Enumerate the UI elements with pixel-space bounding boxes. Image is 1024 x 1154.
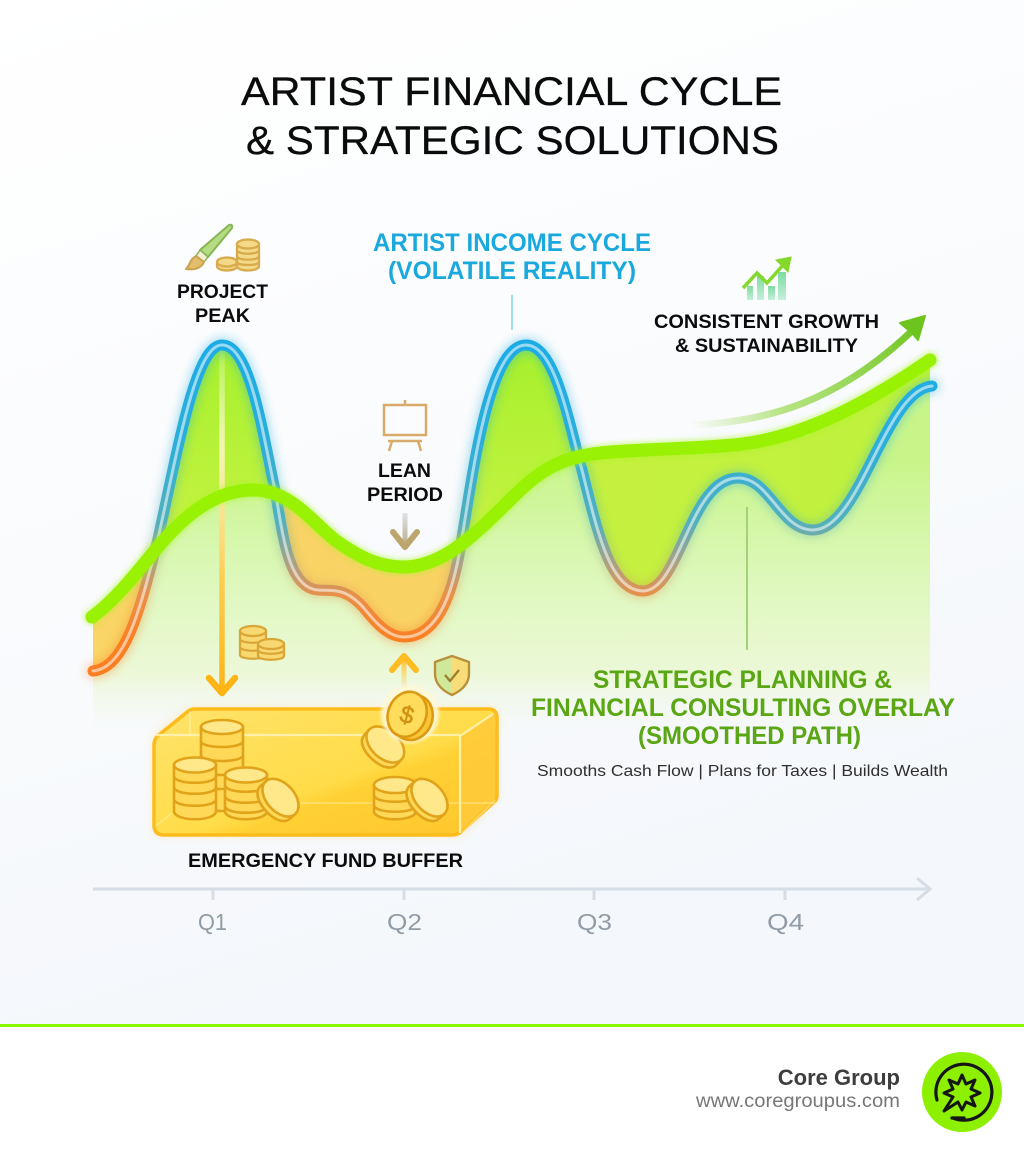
arrow: lean period — [393, 513, 417, 547]
label: strategic planning overlay — [531, 666, 955, 750]
leader line: income cycle — [511, 295, 513, 330]
coin stack: centre — [225, 768, 267, 819]
label: artist income cycle: ARTIST INCOME CYCLE — [373, 229, 651, 257]
label: lean period: PERIOD — [367, 484, 443, 506]
logo — [922, 1052, 1002, 1132]
time axis — [93, 878, 930, 935]
label: strategic planning overlay: (SMOOTHED PATH) — [638, 722, 861, 750]
footer url: www.coregroupus.com — [695, 1091, 900, 1112]
footer — [0, 1024, 1024, 1154]
title: ARTIST FINANCIAL CYCLE — [241, 70, 782, 114]
icon: paintbrush and coins — [186, 225, 259, 270]
coin stack: left — [174, 758, 216, 819]
axis labels: Q1 — [198, 909, 227, 935]
smoothed strategic path — [92, 360, 930, 617]
label: consistent growth — [654, 311, 879, 357]
coin stack: right — [374, 777, 416, 819]
label: strategic planning overlay: FINANCIAL CONSULTING OVERLAY — [531, 694, 955, 722]
axis labels: Q3 — [577, 909, 612, 935]
icon: easel — [384, 400, 426, 451]
arrow: consistent growth sweep — [692, 316, 925, 425]
text: benefits: Smooths Cash Flow | Plans for Taxes | Builds Wealth — [537, 763, 948, 780]
label: project peak: PEAK — [195, 305, 250, 327]
area: dips below smoothed path — [93, 368, 930, 666]
coin: dollar: $ — [397, 701, 417, 730]
coin: dollar — [381, 685, 440, 746]
title: & STRATEGIC SOLUTIONS — [246, 119, 779, 163]
leader line: strategic planning — [746, 507, 748, 650]
coin: tilted right — [400, 772, 455, 827]
label: consistent growth: & SUSTAINABILITY — [675, 335, 858, 357]
label: lean period: LEAN — [378, 460, 431, 482]
chart: income cycle and smoothed path — [92, 316, 932, 760]
title — [241, 70, 782, 163]
axis labels: Q2 — [387, 909, 422, 935]
label: project peak — [177, 281, 268, 327]
axis labels — [198, 909, 804, 935]
label: strategic planning overlay: STRATEGIC PLANNING & — [593, 666, 892, 694]
volatile income line — [93, 345, 932, 671]
coin: tilted left — [251, 772, 306, 827]
area under smoothed path — [93, 392, 930, 712]
emergency fund box — [154, 685, 497, 835]
footer brand name: Core Group — [778, 1065, 900, 1090]
label: consistent growth: CONSISTENT GROWTH — [654, 311, 879, 333]
label: artist income cycle — [373, 229, 651, 285]
label: lean period — [367, 460, 443, 506]
box body — [154, 709, 497, 835]
icon: shield — [435, 656, 469, 695]
icon: growth chart — [743, 257, 791, 300]
icon: floating coins — [240, 626, 284, 660]
coin: falling — [356, 719, 411, 774]
axis labels: Q4 — [767, 909, 804, 935]
label: emergency fund buffer: EMERGENCY FUND BUFFER — [188, 850, 463, 872]
area: peaks above smoothed path — [166, 350, 572, 530]
label: artist income cycle: (VOLATILE REALITY) — [388, 257, 636, 285]
arrow: project peak to fund — [209, 350, 235, 693]
coin stack: back — [201, 720, 243, 811]
arrow: buffer to lean period — [392, 656, 416, 690]
label: project peak: PROJECT — [177, 281, 268, 303]
